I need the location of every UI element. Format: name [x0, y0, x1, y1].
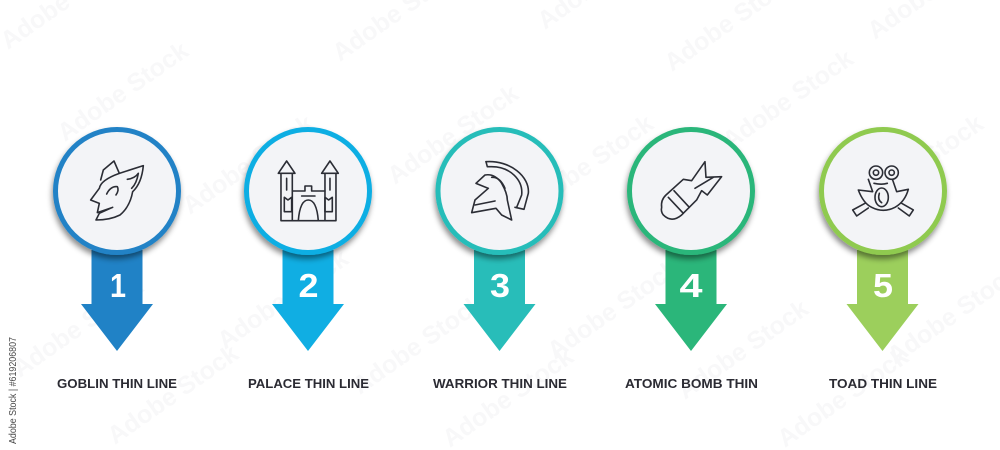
label 4: ATOMIC BOMB THIN	[625, 377, 758, 391]
icon: goblin	[91, 161, 143, 220]
watermark pattern: Adobe Stock	[437, 342, 579, 450]
step 1: goblin	[56, 130, 178, 391]
icon: atomic bomb	[661, 162, 722, 219]
watermark pattern: Adobe Stock	[212, 244, 354, 355]
watermark pattern: Adobe Stock	[52, 36, 194, 147]
watermark pattern: Adobe Stock	[672, 294, 814, 405]
number 4: 4	[680, 267, 703, 304]
number 5: 5	[873, 267, 893, 304]
step 4: atomic bomb	[625, 130, 758, 391]
watermark pattern: Adobe Stock	[847, 109, 989, 220]
arrow 4	[655, 250, 727, 351]
step 3: warrior	[433, 130, 567, 391]
step 2: palace	[246, 130, 370, 391]
arrow 5	[846, 250, 918, 351]
icon: warrior helmet	[472, 162, 528, 220]
circle 3	[438, 130, 561, 252]
label 1: GOBLIN THIN LINE	[57, 377, 177, 391]
circle 1	[56, 130, 178, 252]
watermark pattern: Adobe Stock	[177, 109, 319, 220]
number 1: 1	[110, 267, 126, 304]
number 2: 2	[298, 267, 318, 304]
arrow 2	[272, 250, 344, 351]
circle 5	[822, 130, 944, 252]
number 3: 3	[490, 267, 510, 304]
watermark pattern: Adobe Stock	[772, 342, 914, 450]
label 3: WARRIOR THIN LINE	[433, 377, 567, 391]
icon: toad	[853, 166, 913, 216]
label 5: TOAD THIN LINE	[829, 377, 937, 391]
label 2: PALACE THIN LINE	[248, 377, 369, 391]
icon: palace	[278, 161, 338, 221]
circle 2	[246, 130, 370, 252]
stock id side text: Adobe Stock | #619206807	[7, 337, 19, 444]
watermark pattern: Adobe Stock	[7, 272, 149, 383]
watermark pattern: Adobe Stock	[517, 109, 659, 220]
circle 4	[630, 130, 752, 252]
watermark pattern: Adobe Stock	[717, 44, 859, 155]
watermark pattern: Adobe Stock	[382, 79, 524, 190]
arrow 3	[464, 250, 536, 351]
watermark pattern: Adobe Stock	[542, 254, 684, 365]
watermark pattern: Adobe Stock	[347, 289, 489, 400]
arrow 1	[81, 250, 153, 351]
step 5: toad	[822, 130, 944, 391]
watermark pattern: Adobe Stock	[102, 339, 244, 450]
